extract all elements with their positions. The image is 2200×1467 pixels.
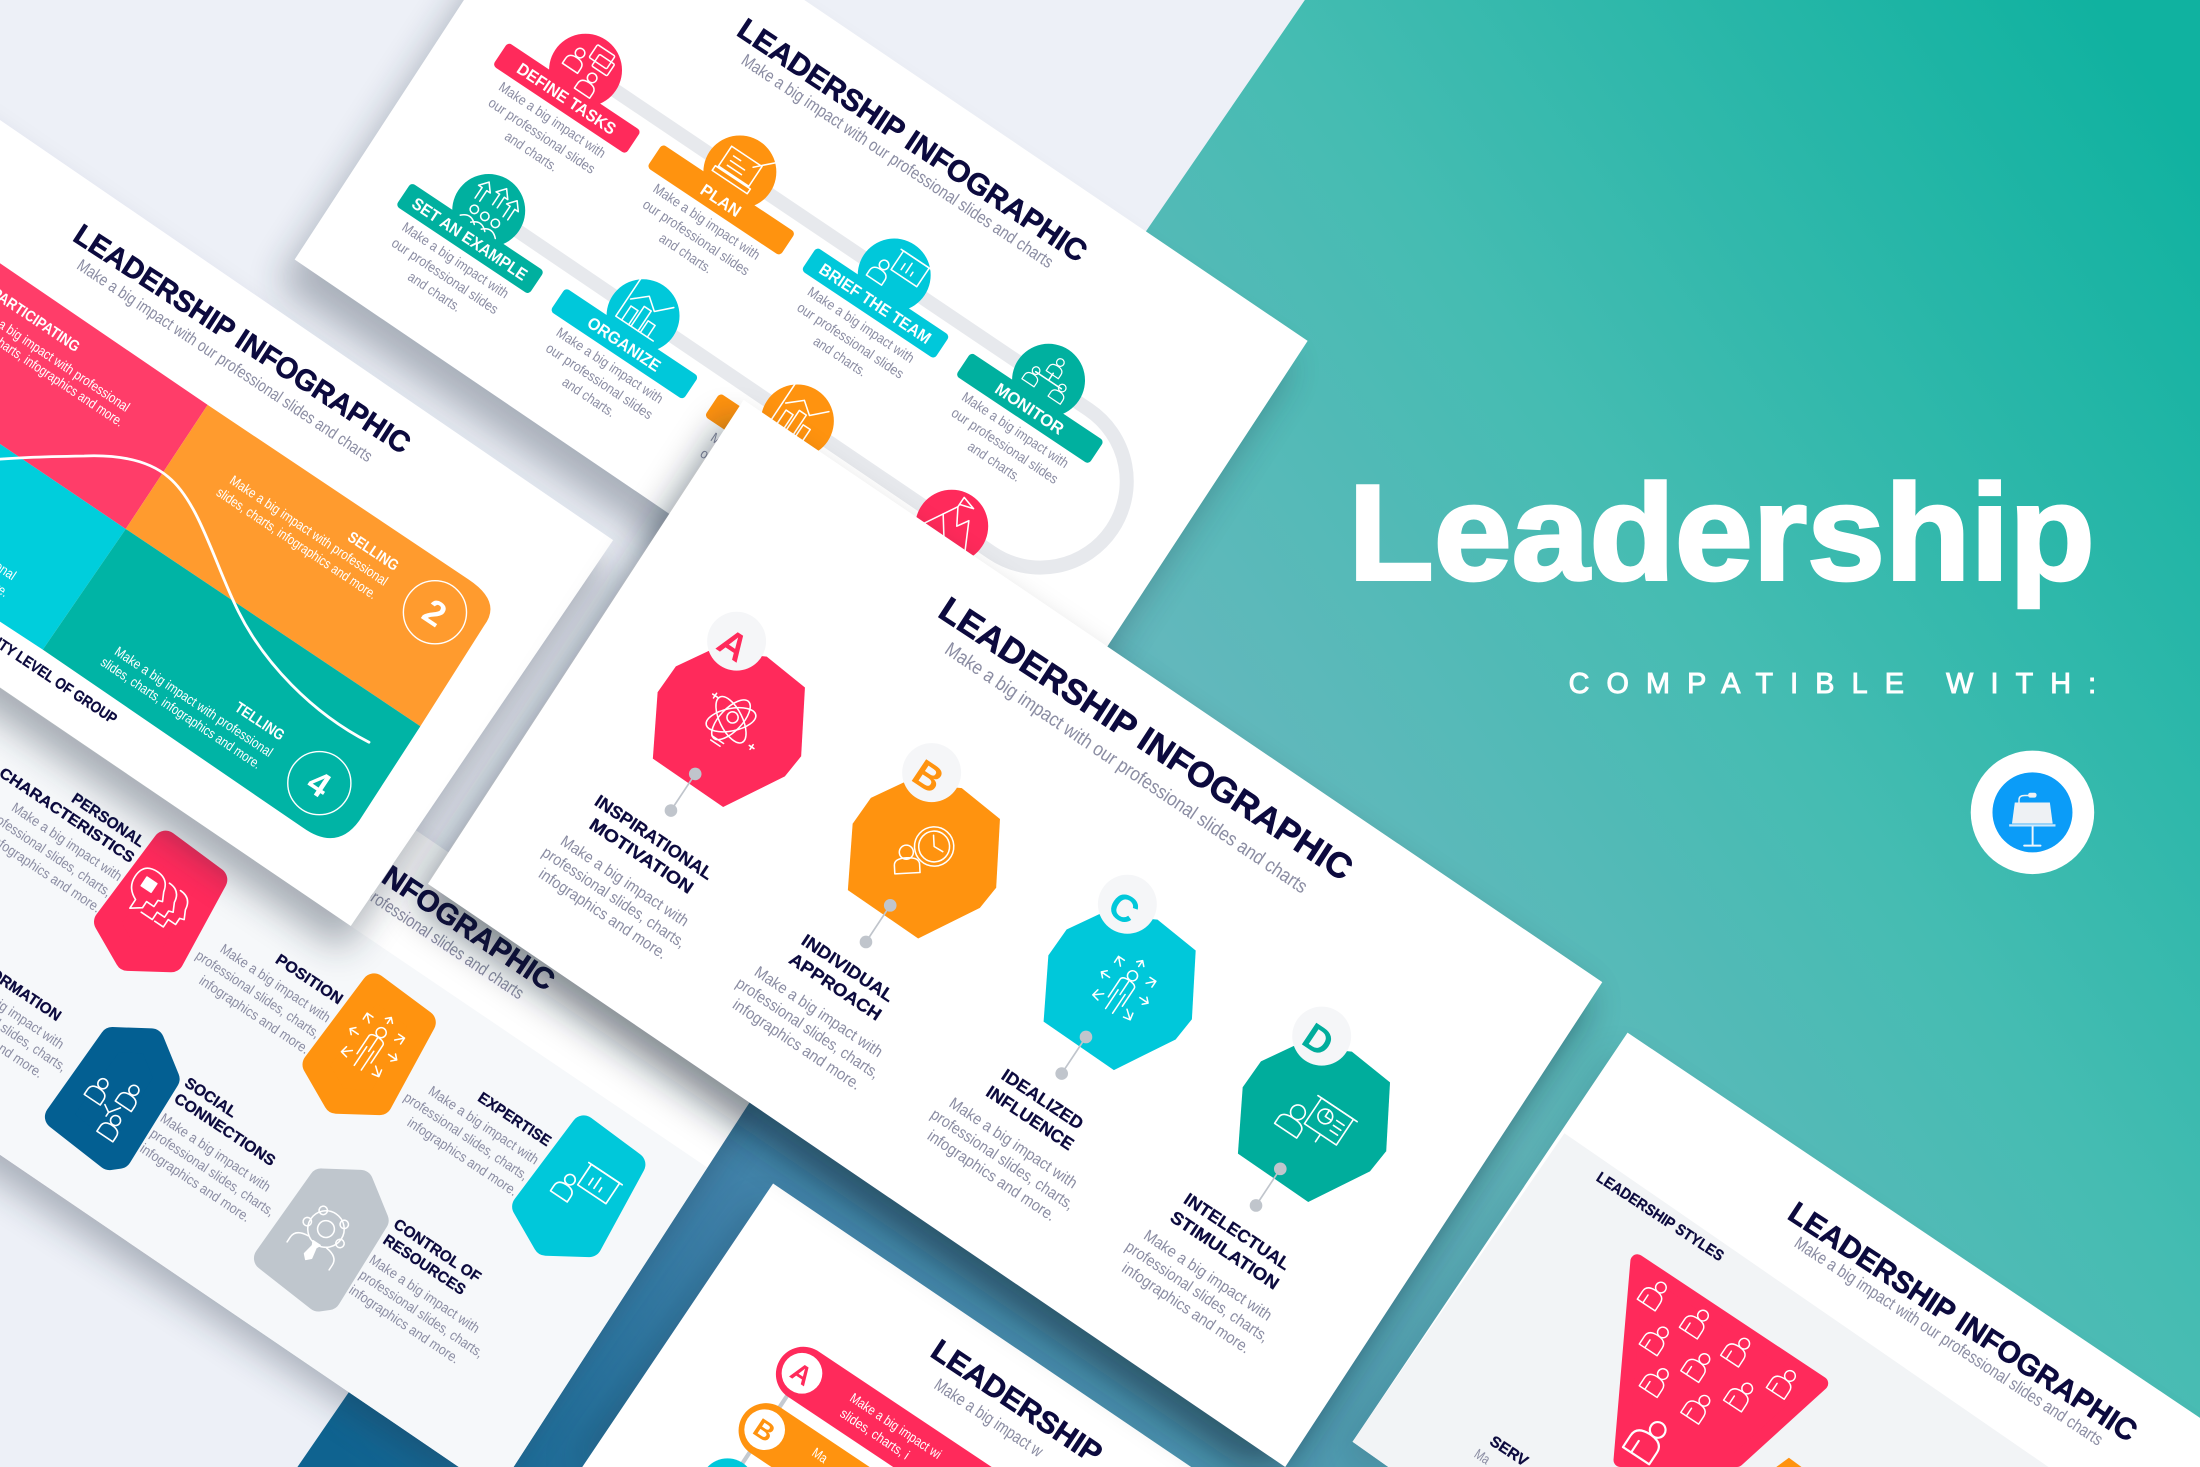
step: brief the team: Make a big impact with — [805, 283, 918, 366]
quadrant: telling: TELLING — [231, 699, 288, 744]
text: social connections: professional slides, charts, — [147, 1125, 278, 1219]
pill: B — [739, 1403, 870, 1467]
slide: situational matrix — [0, 24, 613, 951]
subheading: Make a big impact with our professional slides and charts — [74, 255, 376, 466]
subheading: Make a big impact with our professional slides and charts — [738, 50, 1057, 272]
text C — [916, 1044, 1118, 1230]
text: social connections — [137, 1074, 312, 1234]
step: set an example — [364, 136, 575, 343]
step: brief the team: our professional slides — [794, 299, 907, 382]
step: monitor — [924, 306, 1135, 512]
step: organize: ORGANIZE — [584, 313, 664, 376]
text: control of resources: infographics and more. — [346, 1282, 463, 1366]
text D: infographics and more. — [1119, 1259, 1253, 1357]
text: position: Make a big impact with — [217, 941, 334, 1025]
card: control of resources — [267, 1181, 376, 1299]
text C: IDEALIZED — [998, 1065, 1087, 1134]
step: brief the team — [769, 200, 981, 407]
slide: lettered list — [570, 1183, 1191, 1467]
hexagon A — [653, 612, 805, 817]
slide: process path — [278, 0, 1308, 786]
text: social connections: CONNECTIONS — [171, 1090, 278, 1170]
text: social connections: SOCIAL — [181, 1075, 240, 1121]
step: set an example: SET AN EXAMPLE — [408, 194, 531, 284]
text C: professional slides, charts, — [927, 1105, 1077, 1214]
heading: LEADERSHIP — [925, 1334, 1108, 1467]
icon: resources — [285, 1200, 357, 1273]
text D — [1111, 1176, 1313, 1362]
step: brief the team: BRIEF THE TEAM — [816, 260, 935, 348]
quadrant: selling: Make a big impact with professional — [227, 473, 391, 589]
text C: INFLUENCE — [983, 1082, 1078, 1154]
text B: professional slides, charts, — [733, 974, 883, 1083]
text A: INSPIRATIONAL — [591, 791, 717, 884]
text: control of resources: CONTROL OF — [390, 1216, 484, 1286]
text: position — [182, 913, 346, 1057]
step: define tasks: and charts. — [502, 128, 561, 175]
step: lead (partly hidden) — [901, 476, 1002, 577]
icons: team members — [1623, 1276, 1800, 1464]
text C: infographics and more. — [924, 1127, 1059, 1225]
hexagon D — [1238, 1007, 1390, 1212]
card: social connections — [58, 1040, 167, 1157]
icon: keynote — [1971, 751, 2094, 874]
pill: A: slides, charts, i — [837, 1406, 912, 1463]
pill: B: B — [748, 1413, 781, 1448]
icon: network — [71, 1064, 146, 1142]
text A — [528, 782, 730, 968]
step: motivate (partly hidden) — [683, 346, 884, 537]
text: expertise: Make a big impact with — [426, 1082, 542, 1167]
quadrant: telling: slides, charts, infographics and more. — [98, 654, 264, 772]
subtitle: COMPATIBLE WITH: — [1569, 668, 2096, 700]
step: motivate (partly hidden): Make a big impact with — [708, 429, 821, 512]
step: monitor: our professional slides — [949, 404, 1061, 487]
text D: INTELECTUAL — [1180, 1189, 1294, 1274]
step: monitor: and charts. — [965, 438, 1024, 485]
step: set an example: Make a big impact with — [399, 219, 512, 301]
step: set an example: and charts. — [405, 268, 464, 315]
text B — [722, 913, 923, 1099]
subheading: Make a big impact with our professional slides and charts — [217, 786, 528, 1003]
text D: Make a big impact with — [1140, 1226, 1275, 1325]
text B: infographics and more. — [729, 996, 864, 1094]
text: control of resources — [346, 1216, 521, 1376]
subheading: Make a big impact with our professional slides and charts — [941, 638, 1311, 898]
quadrant: selling: SELLING — [344, 529, 402, 575]
pill: A — [776, 1347, 992, 1467]
step: plan: PLAN — [697, 180, 745, 221]
quadrant: delegating — [0, 425, 126, 650]
icon: heads — [119, 863, 198, 937]
text D: STIMULATION — [1167, 1207, 1283, 1294]
title: Leadership — [1348, 456, 2095, 608]
heading: LEADERSHIP INFOGRAPHIC — [1782, 1196, 2143, 1449]
hexagon B: B — [905, 752, 951, 802]
pill: C — [708, 1458, 747, 1467]
pill: A: A — [785, 1356, 818, 1392]
quadrant: selling: 2 — [415, 592, 453, 635]
step: organize: Make a big impact with — [554, 324, 666, 407]
quadrant: telling: 4 — [300, 762, 338, 806]
text: personal characteristics — [0, 749, 148, 916]
marker: orange — [1776, 1458, 1802, 1467]
step: motivate (partly hidden): our professional slides — [697, 445, 810, 528]
step: plan: our professional slides — [640, 196, 753, 279]
hexagon A: A — [710, 621, 756, 671]
hexagon B — [848, 743, 1000, 948]
text A: Make a big impact with — [557, 832, 692, 930]
card: expertise — [525, 1128, 633, 1244]
text: position: POSITION — [272, 951, 346, 1008]
text: expertise: EXPERTISE — [475, 1089, 554, 1150]
text B: APPROACH — [785, 949, 885, 1025]
step: define tasks: DEFINE TASKS — [513, 59, 620, 139]
icon: person with arrows — [334, 1002, 415, 1083]
step: define tasks: Make a big impact with — [496, 78, 609, 161]
step: organize — [518, 241, 730, 448]
step: set an example: our professional slides — [389, 234, 502, 317]
curve — [0, 456, 369, 742]
text A: infographics and more. — [535, 865, 670, 963]
step: plan: and charts. — [656, 230, 715, 276]
text B: Make a big impact with — [751, 963, 886, 1061]
text A: MOTIVATION — [586, 814, 697, 898]
text: control of resources: RESOURCES — [380, 1232, 469, 1299]
hexagon C: C — [1100, 884, 1146, 934]
text: control of resources: Make a big impact with — [367, 1251, 483, 1336]
quadrant: telling — [43, 529, 420, 838]
quadrant: telling: Make a big impact with professional — [112, 644, 276, 760]
card: position — [315, 986, 423, 1102]
text: position: professional slides, charts, — [193, 947, 323, 1041]
process track — [490, 70, 1127, 568]
step: brief the team: and charts. — [811, 333, 870, 379]
step: monitor: Make a big impact with — [959, 389, 1072, 471]
text: expertise — [391, 1055, 554, 1199]
quadrant: selling: slides, charts, infographics and more. — [214, 485, 380, 602]
quadrant: selling — [126, 405, 490, 726]
icon: presenter board — [550, 1154, 622, 1222]
slide: leadership styles — [1339, 1033, 2200, 1467]
hexagon C — [1044, 875, 1196, 1080]
text A: professional slides, charts, — [539, 843, 689, 952]
heading: LEADERSHIP INFOGRAPHIC — [932, 590, 1360, 888]
heading: LEADERSHIP INFOGRAPHIC — [731, 13, 1093, 269]
text: social connections: Make a big impact with — [158, 1110, 274, 1195]
text: social connections: infographics and more. — [137, 1140, 254, 1225]
heading: LEADERSHIP INFOGRAPHIC — [68, 218, 416, 461]
text: personal characteristics: PERSONAL — [68, 790, 148, 851]
card: personal characteristics — [107, 843, 215, 960]
text: personal characteristics: Make a big impact with — [9, 799, 125, 884]
quadrant: participating — [0, 244, 208, 529]
text: expertise: infographics and more. — [405, 1114, 521, 1199]
text C: Make a big impact with — [946, 1094, 1081, 1192]
step: organize: and charts. — [559, 373, 619, 420]
heading: LEADERSHIP INFOGRAPHIC — [204, 744, 561, 998]
label: leadership styles: LEADERSHIP STYLES — [1593, 1169, 1727, 1265]
text: position: infographics and more. — [196, 972, 313, 1057]
triangle — [1621, 1261, 1821, 1460]
text D: professional slides, charts, — [1122, 1238, 1272, 1346]
step: monitor: MONITOR — [991, 379, 1067, 439]
step: plan: Make a big impact with — [650, 180, 763, 263]
text: control of resources: professional slides, charts, — [356, 1266, 487, 1361]
hexagon D: D — [1295, 1016, 1341, 1066]
step: plan — [615, 97, 827, 304]
slide: main four factors — [414, 400, 1602, 1467]
text B: INDIVIDUAL — [798, 930, 898, 1006]
step: organize: our professional slides — [543, 340, 656, 422]
connector — [740, 1373, 802, 1467]
text: expertise: professional slides, charts, — [401, 1089, 531, 1183]
slide: influence factors — [0, 450, 770, 1467]
text: information (cropped) — [0, 952, 70, 1081]
step: define tasks — [460, 0, 672, 202]
step: define tasks: our professional slides — [486, 94, 598, 177]
